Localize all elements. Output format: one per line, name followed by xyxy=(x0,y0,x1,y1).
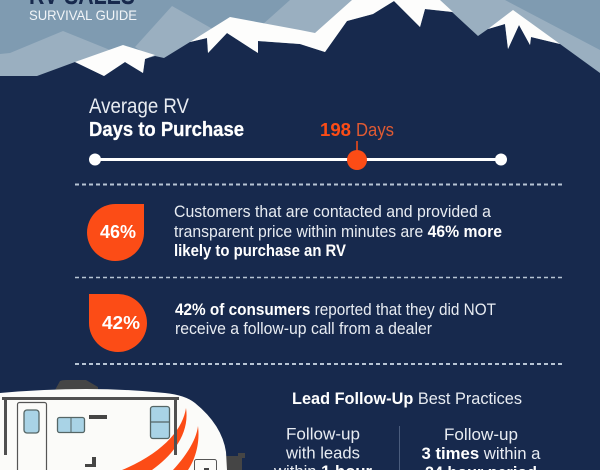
roof unit xyxy=(55,380,98,391)
snow caps xyxy=(75,0,560,76)
column: within 1 hour: with leads xyxy=(285,444,360,462)
stat: 46 percent xyxy=(87,202,502,261)
text block: no follow-up call xyxy=(175,300,496,338)
small hatch xyxy=(194,460,216,470)
roof rail xyxy=(2,397,179,455)
text block: 46% more likely: transparent price within minutes are 46% more xyxy=(174,222,502,241)
heading: average days to purchase: Average RV xyxy=(89,95,189,118)
door handle marks xyxy=(85,457,96,467)
rear hitch xyxy=(226,453,245,470)
column: within 1 hour xyxy=(273,424,372,470)
heading: average days to purchase xyxy=(89,95,244,141)
text block: 46% more likely: Customers that are contacted and provided a xyxy=(174,202,492,221)
stat: 42 percent xyxy=(89,294,496,352)
heading: average days to purchase: Days to Purchase xyxy=(89,118,244,141)
door window xyxy=(24,410,39,433)
icon: orange drop 42%: 42% xyxy=(102,312,140,333)
slider: 198 days: 198 xyxy=(320,119,351,140)
text block: no follow-up call: receive a follow-up call from a dealer xyxy=(175,319,432,338)
background sky xyxy=(0,0,600,100)
vent slot xyxy=(89,415,107,419)
text block: 46% more likely: likely to purchase an RV xyxy=(174,241,347,260)
slider: 198 days: Days xyxy=(356,119,394,140)
icon: orange drop 46% xyxy=(87,204,144,261)
title: SURVIVAL GUIDE xyxy=(29,7,137,23)
column: within 1 hour: Follow-up xyxy=(286,424,360,444)
rear window xyxy=(150,406,170,438)
orange swooshes xyxy=(122,408,199,470)
column: 3 times within 24 hours: 3 times within a xyxy=(422,444,541,463)
slider: 198 days xyxy=(89,119,507,170)
distant mountains xyxy=(0,0,600,80)
text block: 46% more likely xyxy=(174,202,502,260)
divider xyxy=(398,426,400,470)
text block: no follow-up call: 42% of consumers reported that they did NOT xyxy=(175,300,496,319)
title xyxy=(29,0,137,23)
column: 3 times within 24 hours: Follow-up xyxy=(444,425,518,444)
door xyxy=(18,402,46,470)
side window xyxy=(58,417,84,433)
column: 3 times within 24 hours xyxy=(422,425,541,470)
icon: orange drop 42% xyxy=(89,294,147,352)
RV body xyxy=(0,389,227,470)
icon: orange drop 46%: 46% xyxy=(100,221,136,242)
heading: lead follow-up best practices: Lead Follow-Up Best Practices xyxy=(292,389,522,408)
illustration: RV xyxy=(0,380,245,470)
